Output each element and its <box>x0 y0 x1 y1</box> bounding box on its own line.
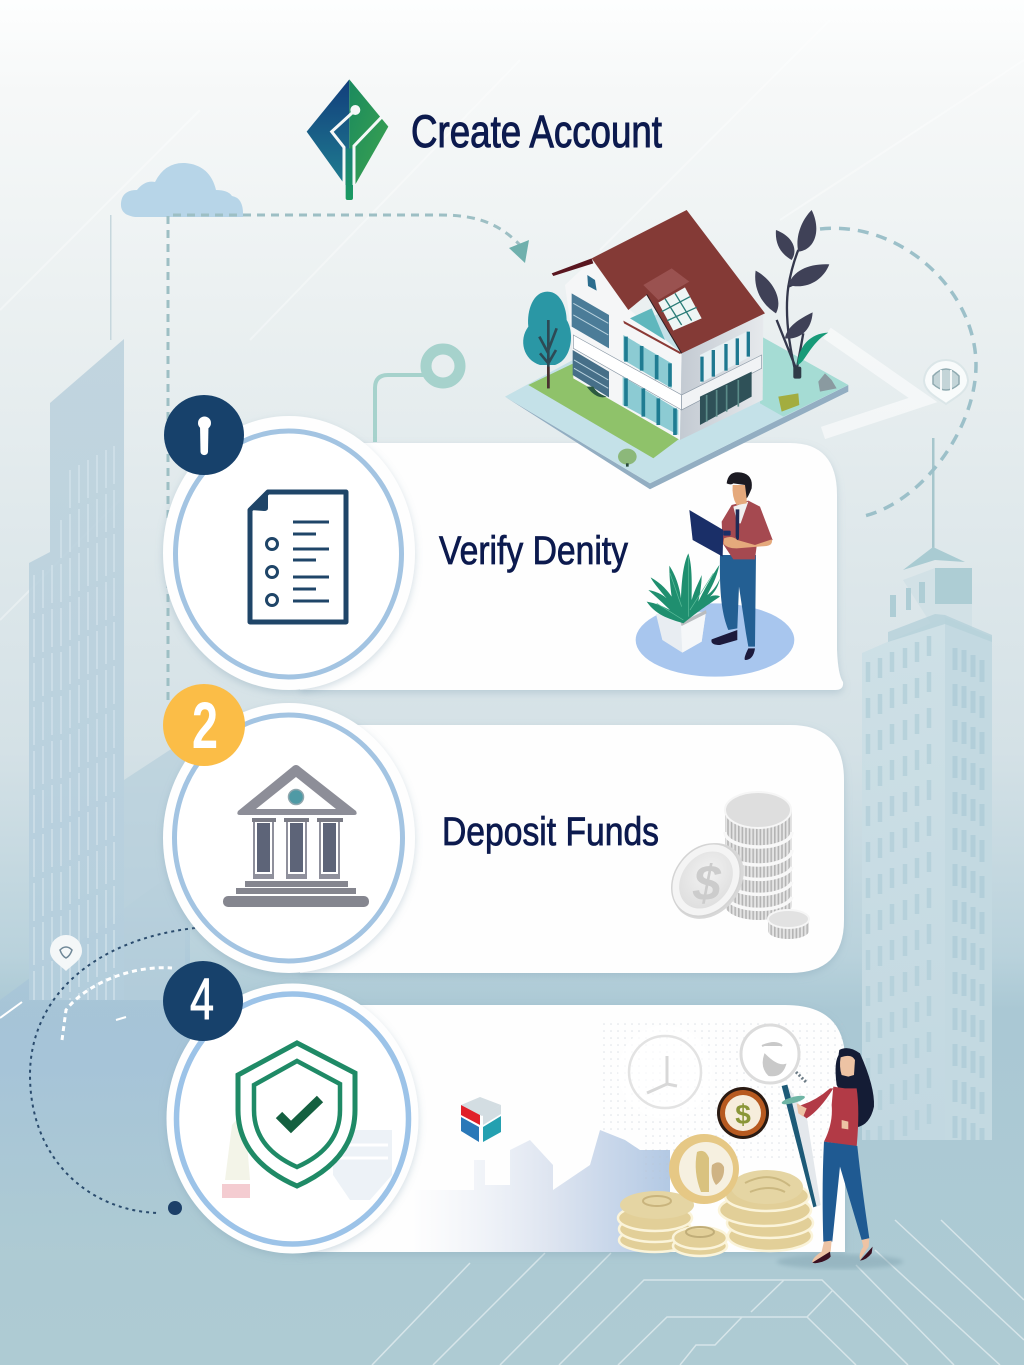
arrow: dashed route to house <box>168 215 529 700</box>
illustration: isometric house <box>505 210 848 489</box>
city skyline <box>410 1130 670 1252</box>
faded icons in circle <box>222 1118 392 1200</box>
small gold coin <box>717 1087 769 1139</box>
tree <box>523 292 571 365</box>
badge 4 <box>163 961 243 1041</box>
title: Create Account <box>411 106 662 157</box>
icon: map pin left <box>50 935 82 971</box>
badge 1 <box>164 395 244 475</box>
logo <box>307 79 388 200</box>
bottom-left curved network <box>0 928 195 1215</box>
lower left blue field <box>0 860 190 1260</box>
house walls <box>565 260 682 440</box>
step 2 label: Deposit Funds <box>442 810 659 854</box>
right skyscraper <box>862 438 992 1140</box>
icon: cube <box>461 1097 501 1142</box>
icon: silver coins <box>658 792 809 939</box>
card 2 background <box>300 725 844 973</box>
halftone dots <box>600 1020 845 1180</box>
clock medallion <box>618 1025 712 1119</box>
icon: map pin right <box>924 360 968 404</box>
icon: document checklist <box>250 492 346 622</box>
badge 4: 4 <box>190 967 214 1032</box>
arrow: dashed route right <box>820 228 976 517</box>
gold coin stacks <box>618 1134 813 1256</box>
roof <box>592 210 765 353</box>
plant <box>777 250 818 377</box>
left skyscrapers <box>29 215 185 1000</box>
panel: step 2 <box>163 684 844 973</box>
icon: shield check <box>238 1043 355 1186</box>
card 1 background <box>300 443 843 690</box>
circle 1 <box>163 416 415 690</box>
card 3 background <box>300 1005 845 1252</box>
illustration: man with laptop and plant <box>636 472 794 677</box>
road behind house <box>823 333 923 433</box>
icon: bank <box>223 765 369 907</box>
illustration: woman with magnifier <box>777 1048 903 1269</box>
garden objects <box>778 393 799 412</box>
panel: step 1 <box>163 395 843 690</box>
icon: node connector <box>375 349 460 442</box>
circle 2 <box>163 703 415 973</box>
small gold coin: $ <box>735 1099 751 1130</box>
icon: cloud <box>121 163 243 217</box>
step 1 label: Verify Denity <box>439 529 628 573</box>
circle 3 <box>166 984 418 1254</box>
panel: step 3 <box>163 961 845 1256</box>
badge 2: 2 <box>192 688 218 762</box>
magnifier <box>741 1025 806 1083</box>
icon: silver coins: $ <box>692 855 722 911</box>
badge 2 <box>163 684 245 766</box>
